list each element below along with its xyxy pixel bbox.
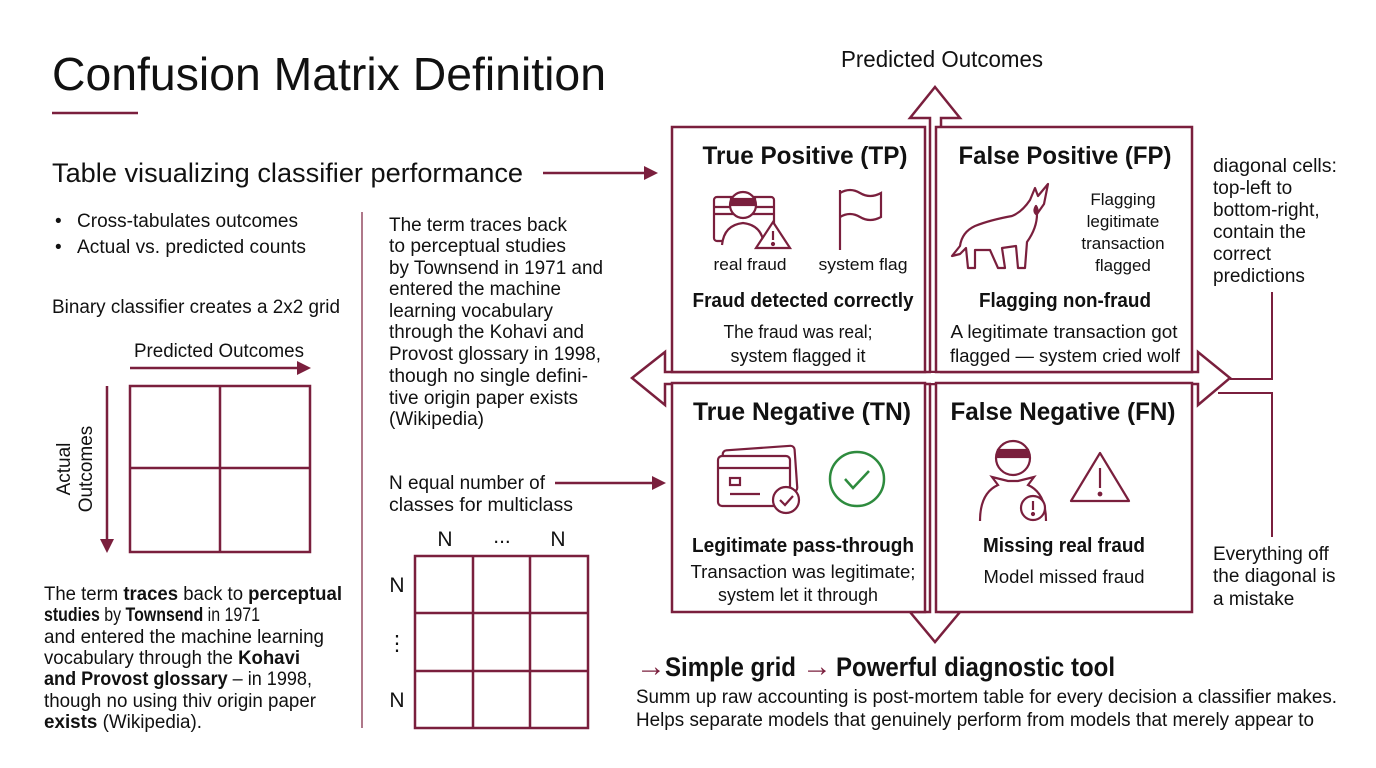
panel: true negative: system let it through: [718, 585, 878, 605]
panel: true positive: True Positive (TP): [702, 142, 908, 170]
middle paragraph: by Townsend in 1971 and: [389, 257, 603, 279]
panel: false negative: [936, 383, 1192, 612]
panel: true positive: [672, 127, 925, 372]
bullets: Cross-tabulates outcomes: [77, 211, 298, 232]
icon: green check: [830, 452, 884, 506]
bottom-left paragraph: studies by Townsend in 1971: [44, 605, 260, 626]
text: diagonal note: correct: [1213, 244, 1272, 265]
bottom summary: Summ up raw accounting is post-mortem table for every decision a classifier makes.: [636, 687, 1337, 708]
middle paragraph: Provost glossary in 1998,: [389, 343, 601, 365]
bottom summary: Simple grid: [665, 652, 796, 682]
middle paragraph: entered the machine: [389, 278, 561, 300]
arrow: multiclass to TN: [555, 476, 666, 490]
text: diagonal note: predictions: [1213, 266, 1305, 287]
icon: flag: [840, 190, 881, 250]
NxN grid: ⋮: [386, 632, 408, 655]
middle paragraph: though no single defini-: [389, 365, 588, 387]
middle paragraph: through the Kohavi and: [389, 321, 584, 343]
bullets: Actual vs. predicted counts: [77, 237, 306, 258]
connectors: right annotations: [1218, 292, 1272, 537]
panel: true positive: Fraud detected correctly: [692, 290, 914, 312]
middle paragraph: [389, 214, 603, 430]
text: off-diagonal note: a mistake: [1213, 589, 1294, 610]
text: diagonal note: diagonal cells:: [1213, 156, 1337, 177]
NxN grid: N: [437, 528, 453, 551]
heading: predicted outcomes: Predicted Outcomes: [841, 46, 1043, 72]
panel: false positive: flagged: [1095, 256, 1151, 275]
NxN grid: ...: [493, 525, 511, 548]
bottom summary: Helps separate models that genuinely perform from models that merely appear to: [636, 710, 1314, 731]
bottom-left paragraph: and entered the machine learning: [44, 627, 324, 648]
arrow: subtitle to TP: [543, 166, 658, 180]
text: diagonal note: bottom-right,: [1213, 200, 1320, 221]
bottom-left paragraph: exists (Wikipedia).: [44, 712, 202, 733]
icon: hooded thief: [980, 441, 1046, 521]
panel: false positive: [936, 127, 1192, 372]
middle paragraph: tive origin paper exists: [389, 387, 578, 409]
2x2 grid diagram: Predicted Outcomes: [134, 341, 304, 362]
panel: false positive: transaction: [1081, 234, 1165, 253]
middle paragraph: The term traces back: [389, 214, 567, 236]
2x2 grid diagram: [54, 341, 311, 553]
text: diagonal note: [1213, 156, 1337, 287]
panel: true positive: system flagged it: [730, 346, 866, 366]
panel: true negative: True Negative (TN): [693, 398, 911, 426]
text: off-diagonal note: [1213, 544, 1336, 610]
bottom summary: Powerful diagnostic tool: [836, 652, 1115, 682]
multiclass note: [389, 472, 573, 516]
panel: false negative: Model missed fraud: [984, 567, 1144, 587]
panel: true negative: Legitimate pass-through: [692, 535, 914, 557]
NxN grid: N: [389, 574, 405, 597]
arrows: matrix axes: [632, 87, 1230, 642]
middle paragraph: learning vocabulary: [389, 300, 553, 322]
panel: false positive: flagged — system cried wolf: [950, 346, 1181, 366]
bottom summary: [636, 650, 1337, 731]
binary text: Binary classifier creates a 2x2 grid: [52, 297, 340, 318]
bottom summary: →: [802, 650, 832, 683]
text: diagonal note: contain the: [1213, 222, 1306, 243]
bottom summary: →: [636, 650, 666, 683]
middle paragraph: (Wikipedia): [389, 408, 484, 430]
2x2 grid diagram: Outcomes: [76, 426, 97, 512]
panel: false positive: A legitimate transaction got: [950, 322, 1178, 342]
bottom-left paragraph: vocabulary through the Kohavi: [44, 648, 300, 669]
icon: cards with check: [718, 446, 799, 513]
panel: false positive: Flagging: [1090, 190, 1156, 209]
icon: crying wolf: [952, 184, 1048, 268]
bullets: [55, 211, 306, 258]
bullets: •: [55, 211, 62, 232]
panel: false negative: Missing real fraud: [983, 535, 1145, 557]
multiclass note: classes for multiclass: [389, 494, 573, 516]
bottom-left paragraph: [44, 584, 342, 733]
NxN grid: [386, 525, 588, 728]
text: off-diagonal note: the diagonal is: [1213, 566, 1336, 587]
panel: false positive: Flagging non-fraud: [979, 290, 1151, 312]
panel: true positive: The fraud was real;: [724, 322, 872, 342]
panel: true positive: real fraud: [714, 255, 786, 274]
text: off-diagonal note: Everything off: [1213, 544, 1330, 565]
panel: false positive: False Positive (FP): [958, 142, 1172, 170]
multiclass note: N equal number of: [389, 472, 546, 494]
bottom-left paragraph: though no using thiv origin paper: [44, 691, 317, 712]
panel: true positive: system flag: [818, 255, 908, 274]
panel: true negative: Transaction was legitimate;: [690, 562, 916, 582]
icon: warning: [1071, 453, 1129, 501]
2x2 grid diagram: Actual: [54, 443, 75, 495]
bullets: •: [55, 237, 62, 258]
bottom-left paragraph: The term traces back to perceptual: [44, 584, 342, 605]
panel: false positive: legitimate: [1087, 212, 1159, 231]
title: Confusion Matrix Definition: [52, 48, 606, 100]
NxN grid: N: [550, 528, 566, 551]
panel: true negative: [672, 383, 925, 612]
panel: false negative: False Negative (FN): [950, 398, 1176, 426]
NxN grid: N: [389, 689, 405, 712]
subtitle: Table visualizing classifier performance: [52, 158, 523, 188]
text: diagonal note: top-left to: [1213, 178, 1292, 199]
bottom-left paragraph: and Provost glossary – in 1998,: [44, 669, 312, 690]
icon: fraudster: [714, 192, 790, 248]
middle paragraph: to perceptual studies: [389, 235, 566, 257]
